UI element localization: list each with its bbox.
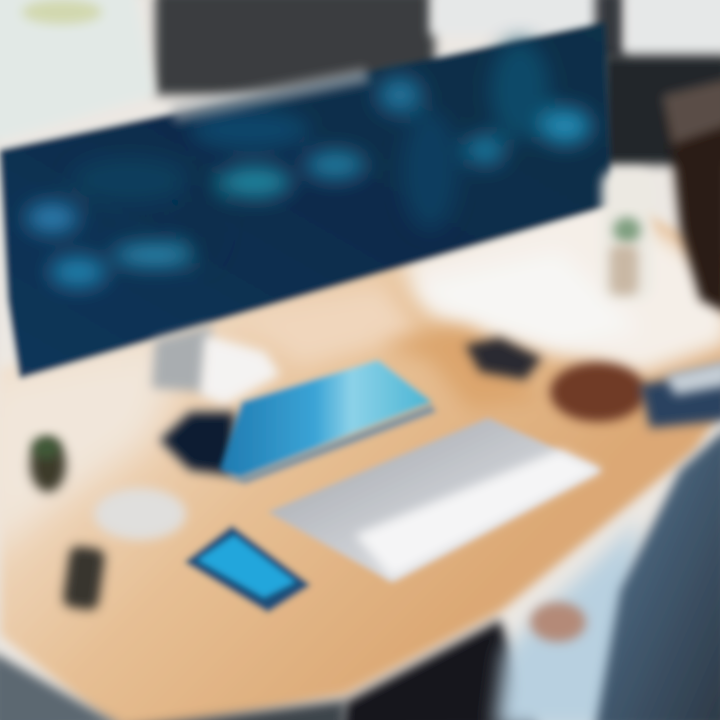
- computer monitor: [0, 22, 612, 378]
- small white mouse: [94, 488, 186, 540]
- monitor stand: [152, 325, 212, 392]
- water bottle: [602, 170, 652, 300]
- floor, dark under the desk: [0, 620, 540, 720]
- sleeve: [640, 365, 720, 428]
- small potted plant: [30, 437, 66, 492]
- hand: [550, 362, 646, 422]
- smartphone: [185, 526, 310, 612]
- desk surface: [0, 190, 720, 720]
- laptop keyboard: [268, 418, 602, 582]
- shirt torso: [595, 425, 720, 720]
- monitor glow and chart blobs: [26, 40, 591, 287]
- jeans and lower hand: [495, 520, 640, 720]
- dark device behind tablet: [160, 412, 235, 475]
- person: [495, 78, 720, 720]
- white papers on the desk: [410, 250, 640, 350]
- paper sheet behind tablet: [200, 335, 280, 405]
- tablet: [220, 360, 436, 484]
- head and hair: [668, 85, 720, 315]
- dark accessory: [62, 545, 106, 611]
- dark object on desk: [465, 337, 542, 380]
